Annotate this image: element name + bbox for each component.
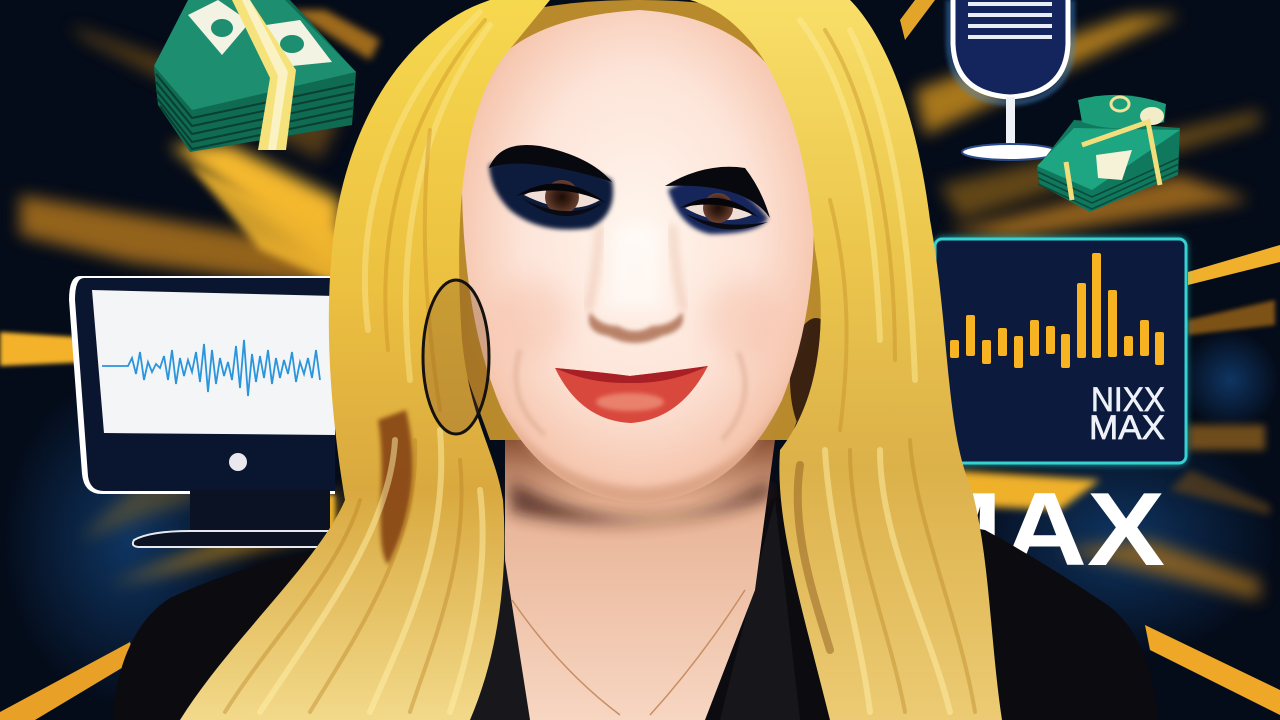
icon: stack of money top left bbox=[154, 0, 356, 152]
icon: desktop monitor with waveform bbox=[69, 276, 335, 547]
left eye bbox=[489, 145, 613, 230]
back hair bbox=[440, 0, 840, 440]
left hair bbox=[180, 0, 550, 720]
mouth bbox=[555, 366, 708, 423]
panel label bbox=[1089, 381, 1165, 447]
right hair bbox=[690, 0, 1002, 720]
earring: right side bbox=[790, 318, 842, 442]
neck and chest bbox=[505, 440, 775, 720]
icon: microphone bbox=[949, 0, 1072, 160]
panel: NIXX MAX audio display bbox=[935, 238, 1186, 464]
jacket bbox=[112, 545, 540, 720]
cheeks bbox=[490, 280, 570, 360]
waveform bbox=[102, 340, 320, 396]
face bbox=[462, 10, 814, 503]
right eye bbox=[665, 167, 770, 234]
bar chart: equalizer bbox=[950, 253, 1164, 368]
smile lines bbox=[516, 350, 745, 440]
icon: small stack of money right bbox=[1037, 95, 1180, 212]
earring: left hoop bbox=[423, 280, 489, 434]
panel label: NIXX bbox=[1091, 381, 1165, 419]
logo text: MAX bbox=[905, 472, 1165, 588]
panel label: MAX bbox=[1089, 409, 1165, 447]
nose bbox=[588, 225, 684, 343]
